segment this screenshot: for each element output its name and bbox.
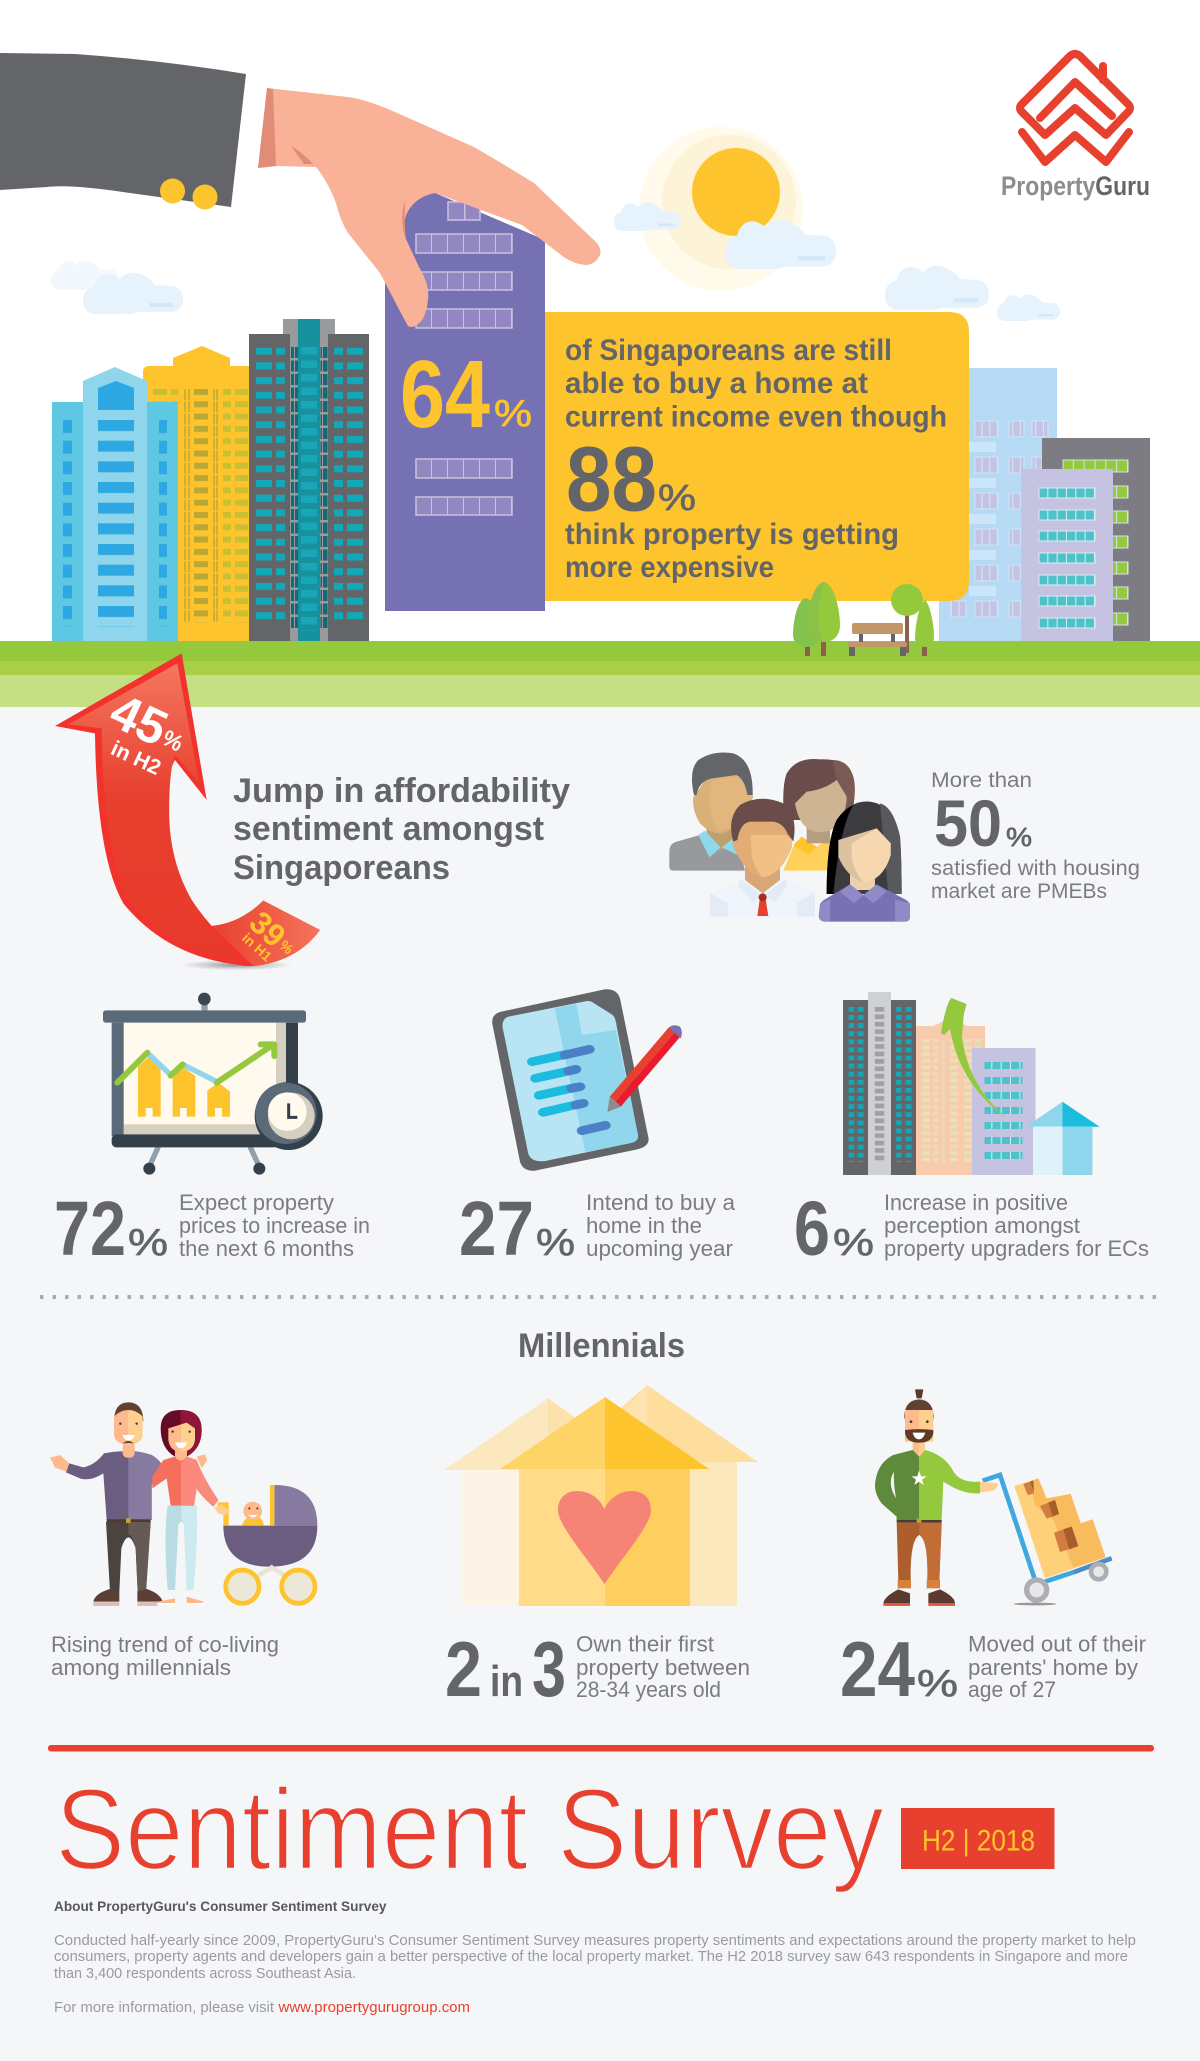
statistic: 2 in 3: 3 xyxy=(532,1625,566,1713)
sun xyxy=(639,127,803,291)
red divider bar xyxy=(48,1745,1154,1752)
statistic: 24 percent xyxy=(840,1625,1146,1713)
about paragraph: than 3,400 respondents across Southeast Asia. xyxy=(54,1966,356,1982)
statistic: 6 percent: Increase in positive xyxy=(884,1190,1068,1215)
statistic: 27 percent: % xyxy=(536,1222,575,1264)
statistic: 2 in 3: Own their first xyxy=(576,1632,714,1656)
statistic: 27 percent: 27 xyxy=(459,1186,534,1272)
period badge: H2 | 2018 xyxy=(922,1824,1035,1858)
statistic: 6 percent: property upgraders for ECs xyxy=(884,1236,1149,1261)
PMEB text: 50 xyxy=(934,786,1002,860)
logo xyxy=(1020,54,1130,162)
statistic: 24 percent: parents' home by xyxy=(968,1655,1138,1680)
yellow building xyxy=(143,346,249,641)
callout text: think property is getting xyxy=(565,518,899,551)
suit sleeve xyxy=(0,53,246,210)
statistic: 72 percent: % xyxy=(128,1222,168,1264)
yellow callout panel xyxy=(543,312,969,601)
more information link: For more information, please visit xyxy=(54,2000,274,2016)
red arrow: % xyxy=(158,725,187,756)
more information link xyxy=(54,2000,470,2016)
statistic: 64 percent: 64 xyxy=(400,341,490,448)
about paragraph xyxy=(54,1933,1136,1982)
about heading: About PropertyGuru's Consumer Sentiment Survey xyxy=(54,1898,387,1914)
statistic: 72 percent: the next 6 months xyxy=(179,1236,354,1261)
callout text: of Singaporeans are still xyxy=(565,334,892,367)
PMEB text: More than xyxy=(931,769,1032,792)
icon: buildings with rising arrow xyxy=(843,992,1100,1175)
period badge xyxy=(901,1808,1054,1869)
statistic: 24 percent: 24 xyxy=(840,1625,915,1713)
light blue building xyxy=(939,368,1057,641)
trees and bench xyxy=(793,582,934,656)
logo wordmark: PropertyGuru xyxy=(1001,171,1150,201)
statistic: 72 percent: 72 xyxy=(54,1186,126,1272)
icon: young family with stroller xyxy=(50,1402,317,1606)
statistic: 24 percent: age of 27 xyxy=(968,1677,1056,1702)
callout text: 88 xyxy=(566,428,657,530)
PMEB text: market are PMEBs xyxy=(931,880,1107,903)
PMEB text: % xyxy=(1006,822,1032,852)
icon: house with heart xyxy=(444,1385,758,1606)
statistic: 6 percent: % xyxy=(833,1222,874,1264)
purple building held by hand xyxy=(385,193,545,611)
statistic: 2 in 3: in xyxy=(490,1657,523,1706)
statistic: 6 percent: 6 xyxy=(794,1186,830,1272)
statistic: 2 in 3: 28-34 years old xyxy=(576,1677,721,1702)
right buildings xyxy=(939,368,1150,641)
red arrow: 45 xyxy=(102,683,176,757)
callout text: able to buy a home at xyxy=(565,367,868,400)
icon: man with hand trolley xyxy=(875,1389,1112,1606)
grey and teal tower xyxy=(249,319,369,641)
heading: Millennials: Millennials xyxy=(518,1327,685,1365)
ground stripes xyxy=(0,641,1200,707)
callout text: more expensive xyxy=(565,551,774,584)
statistic: 24 percent: % xyxy=(917,1663,958,1705)
statistic: 2 in 3 xyxy=(445,1625,750,1713)
red arrow: in H1 xyxy=(239,930,275,965)
blue building xyxy=(52,367,178,641)
affordability heading xyxy=(233,772,570,887)
statistic: 72 percent xyxy=(54,1186,370,1272)
statistic: 2 in 3: property between xyxy=(576,1655,750,1680)
clouds xyxy=(51,203,1060,321)
red arrow: in H2 xyxy=(107,736,165,780)
callout text: % xyxy=(658,477,696,518)
PMEB text xyxy=(931,769,1140,903)
icon: presentation board xyxy=(103,993,323,1175)
about paragraph: consumers, property agents and developers gain a better perspective of the local property market. The H2 2018 survey saw 643 respondents in Singapore and more xyxy=(54,1949,1128,1965)
icon: document and pencil xyxy=(492,989,682,1171)
statistic: 27 percent: Intend to buy a xyxy=(586,1190,736,1215)
more information link: www.propertygurugroup.com xyxy=(277,2000,470,2016)
statistic: 27 percent: home in the xyxy=(586,1213,702,1238)
statistic: 24 percent: Moved out of their xyxy=(968,1632,1146,1656)
affordability heading: sentiment amongst xyxy=(233,810,544,848)
dark grey building xyxy=(1042,438,1150,641)
red arrow: % xyxy=(277,937,297,957)
red arrow: 39 xyxy=(243,904,293,954)
about paragraph: Conducted half-yearly since 2009, PropertyGuru's Consumer Sentiment Survey measures property sentiments and expectations around the property market to help xyxy=(54,1933,1136,1949)
affordability heading: Jump in affordability xyxy=(233,772,570,810)
hand xyxy=(258,88,601,327)
red arrow xyxy=(55,653,320,970)
statistic: 2 in 3: 2 xyxy=(445,1625,482,1713)
text: co-living: Rising trend of co-living xyxy=(51,1632,279,1657)
statistic: 27 percent xyxy=(459,1186,736,1272)
text: co-living xyxy=(51,1632,279,1680)
affordability heading: Singaporeans xyxy=(233,849,450,887)
text: co-living: among millennials xyxy=(51,1655,231,1680)
statistic: 72 percent: Expect property xyxy=(179,1190,334,1215)
callout text xyxy=(565,334,947,584)
lavender building xyxy=(1021,469,1113,641)
icon: professionals group xyxy=(669,752,910,922)
statistic: 6 percent: perception amongst xyxy=(884,1213,1080,1238)
PMEB text: satisfied with housing xyxy=(931,857,1140,880)
statistic: 64 percent: % xyxy=(494,393,532,435)
callout text: current income even though xyxy=(565,400,947,434)
statistic: 6 percent xyxy=(794,1186,1149,1272)
left buildings xyxy=(52,319,369,641)
statistic: 27 percent: upcoming year xyxy=(586,1236,733,1261)
survey title: Sentiment Survey xyxy=(55,1766,884,1894)
statistic: 72 percent: prices to increase in xyxy=(179,1213,370,1238)
